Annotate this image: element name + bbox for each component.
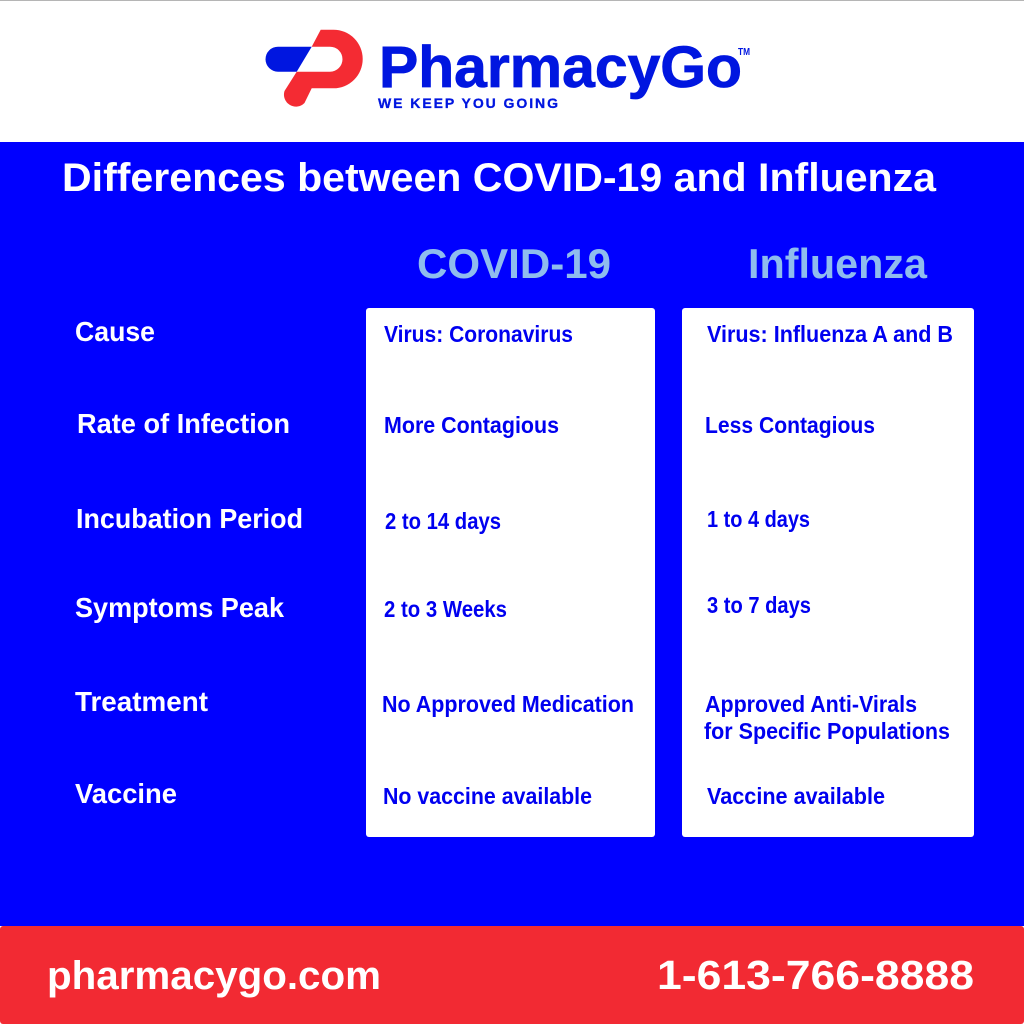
value: incubation: 2 to 14 days [385, 508, 501, 534]
value: cause: Virus: Coronavirus [384, 321, 573, 347]
value: rate of infection: More Contagious [384, 412, 559, 438]
value: treatment: No Approved Medication [382, 691, 634, 717]
tagline: WE KEEP YOU GOING [378, 95, 558, 111]
label: Rate of Infection: Rate of Infection [77, 408, 290, 439]
panel: blue background [0, 142, 1024, 926]
website: pharmacygo.com [47, 954, 381, 998]
value: treatment: Approved Anti-Virals [705, 691, 917, 717]
panel: Influenza values [682, 308, 974, 837]
value: treatment: for Specific Populations [704, 718, 950, 744]
label: Vaccine: Vaccine [75, 778, 177, 809]
icon: pill P mark [266, 30, 363, 107]
value: vaccine: No vaccine available [383, 783, 592, 809]
phone number: 1-613-766-8888 [657, 952, 974, 998]
value: incubation: 1 to 4 days [707, 506, 810, 532]
value: rate of infection: Less Contagious [705, 412, 875, 438]
value: symptoms peak: 2 to 3 Weeks [384, 596, 507, 622]
label: Cause: Cause [75, 316, 155, 347]
heading: Influenza: Influenza [748, 240, 928, 287]
value: symptoms peak: 3 to 7 days [707, 592, 811, 618]
heading: COVID-19: COVID-19 [417, 240, 611, 287]
footer bar [0, 926, 1024, 1024]
value: treatment [704, 691, 950, 744]
row labels [75, 316, 303, 809]
trademark: TM [738, 47, 750, 58]
label: Symptoms Peak: Symptoms Peak [75, 592, 284, 623]
value: vaccine: Vaccine available [707, 783, 885, 809]
wordmark: PharmacyGo [379, 35, 742, 100]
label: Incubation Period: Incubation Period [76, 503, 303, 534]
title: Differences between COVID-19 and Influenza [62, 156, 937, 200]
label: Treatment: Treatment [75, 686, 208, 717]
logo: PharmacyGo [266, 30, 750, 111]
value: cause: Virus: Influenza A and B [707, 321, 953, 347]
panel: COVID-19 values [366, 308, 655, 837]
